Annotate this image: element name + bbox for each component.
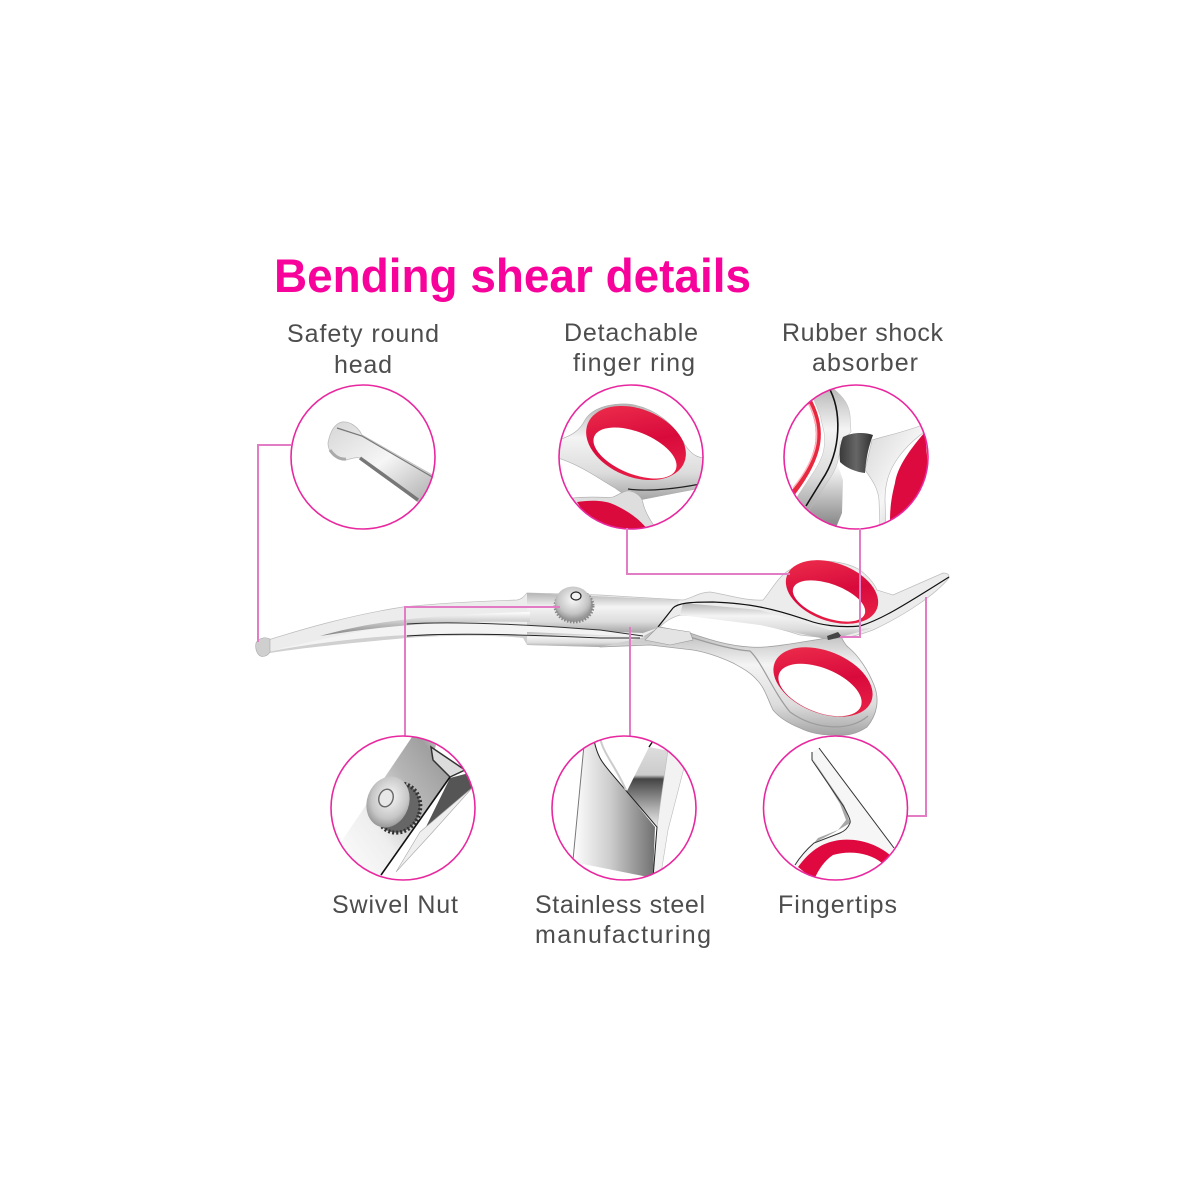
panel: swivel nut [331,734,475,919]
label: stainless steel manufacturing: Stainless steel [535,891,705,919]
label: rubber shock absorber: Rubber shock [782,319,944,347]
title: Bending shear details [274,249,751,302]
rounded tip [256,638,270,656]
icon: finger ring close-up [560,404,702,528]
panel: fingertips [764,736,908,919]
icon: rounded scissor tip [328,422,436,502]
circle outline [559,385,703,529]
illustration: curved scissors [256,548,949,735]
circle outline [291,385,435,529]
panel: safety round head [287,320,439,529]
circle outline [764,736,908,880]
label: safety round head: head [334,351,392,379]
panel: stainless steel manufacturing [535,736,711,949]
connector: stainless steel [629,627,631,736]
panel: rubber shock absorber [782,319,944,530]
connector: fingertips [907,597,926,816]
label: detachable finger ring: finger ring [573,349,695,377]
icon: stainless steel close-up [573,738,686,880]
connector: detachable finger ring [627,528,790,574]
label: detachable finger ring: Detachable [564,319,698,347]
panel: detachable finger ring [558,319,706,538]
connector: safety round head [258,445,291,642]
circle outline [552,736,696,880]
label: fingertips: Fingertips [778,891,897,919]
circle outline [784,385,928,529]
label: rubber shock absorber: absorber [812,349,918,377]
circle outline [331,736,475,880]
icon: rubber absorber close-up [793,385,932,530]
connector: rubber shock absorber [840,528,860,637]
icon: swivel nut close-up [344,738,472,876]
icon: finger rest close-up [795,748,894,880]
swivel nut [555,586,593,622]
label: stainless steel manufacturing: manufacturing [535,921,711,949]
blades and upper handle [268,548,949,653]
lower finger ring and arm [600,627,883,735]
label: swivel nut: Swivel Nut [332,891,458,919]
connector: swivel nut [405,607,560,736]
label: safety round head: Safety round [287,320,439,348]
